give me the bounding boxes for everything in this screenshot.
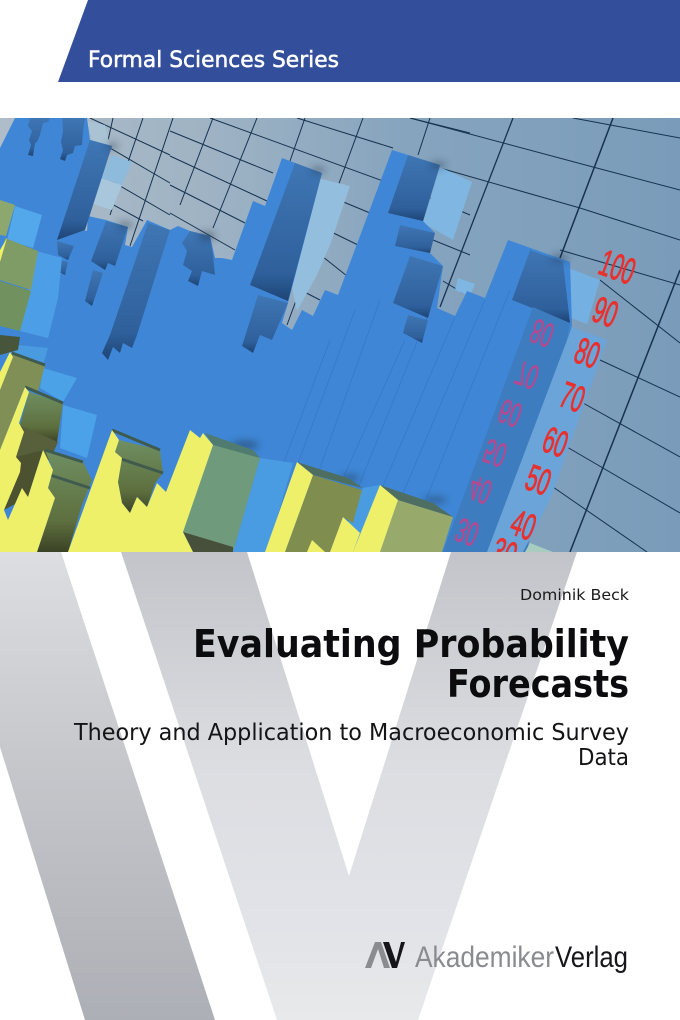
subtitle xyxy=(73,718,629,771)
mirrored scale numbers: 70 xyxy=(510,353,544,397)
red scale numbers: 40 xyxy=(505,503,541,549)
mirrored scale numbers: 30 xyxy=(450,510,484,554)
title: Forecasts xyxy=(447,662,629,706)
mirrored scale numbers: 80 xyxy=(525,311,559,355)
light blue shadow faces on the wall xyxy=(87,121,600,324)
publisher logo xyxy=(365,941,628,974)
background V graphic xyxy=(0,552,577,1020)
red scale numbers: 70 xyxy=(554,375,590,421)
publisher logo: Verlag xyxy=(555,941,628,974)
subtitle: Theory and Application to Macroeconomic Survey xyxy=(73,718,629,746)
bar separators xyxy=(284,290,510,519)
left green column stack xyxy=(0,200,97,458)
mirrored scale numbers: 50 xyxy=(478,431,512,475)
main blue bars xyxy=(0,118,572,552)
cover photo: 3D bar chart xyxy=(0,118,680,577)
subtitle: Data xyxy=(578,743,629,771)
chart wall grid lines xyxy=(90,118,680,552)
mirrored scale numbers: 60 xyxy=(493,391,527,435)
yellow and olive bars, right group xyxy=(265,462,453,552)
contact shadows xyxy=(106,143,569,503)
tall bar side faces with scale xyxy=(443,307,607,552)
publisher logo: Akademiker xyxy=(415,941,554,974)
series banner: Formal Sciences Series xyxy=(88,48,339,73)
yellow and olive bars, middle group xyxy=(68,430,293,552)
red scale numbers: 80 xyxy=(569,331,605,377)
title xyxy=(193,622,629,706)
red scale numbers: 90 xyxy=(587,290,623,336)
red scale numbers: 30 xyxy=(486,531,522,577)
recessed dark bar faces xyxy=(28,118,570,360)
red scale numbers: 100 xyxy=(594,243,640,293)
title: Evaluating Probability xyxy=(193,622,629,666)
mirrored scale numbers: 40 xyxy=(463,468,497,512)
yellow and olive bars, left group xyxy=(0,352,92,552)
red scale numbers: 50 xyxy=(520,458,556,504)
red scale numbers: 60 xyxy=(537,420,573,466)
series banner xyxy=(58,0,680,82)
red scale numbers xyxy=(496,250,636,552)
author: Dominik Beck xyxy=(520,586,629,604)
mirrored scale numbers xyxy=(455,319,554,546)
